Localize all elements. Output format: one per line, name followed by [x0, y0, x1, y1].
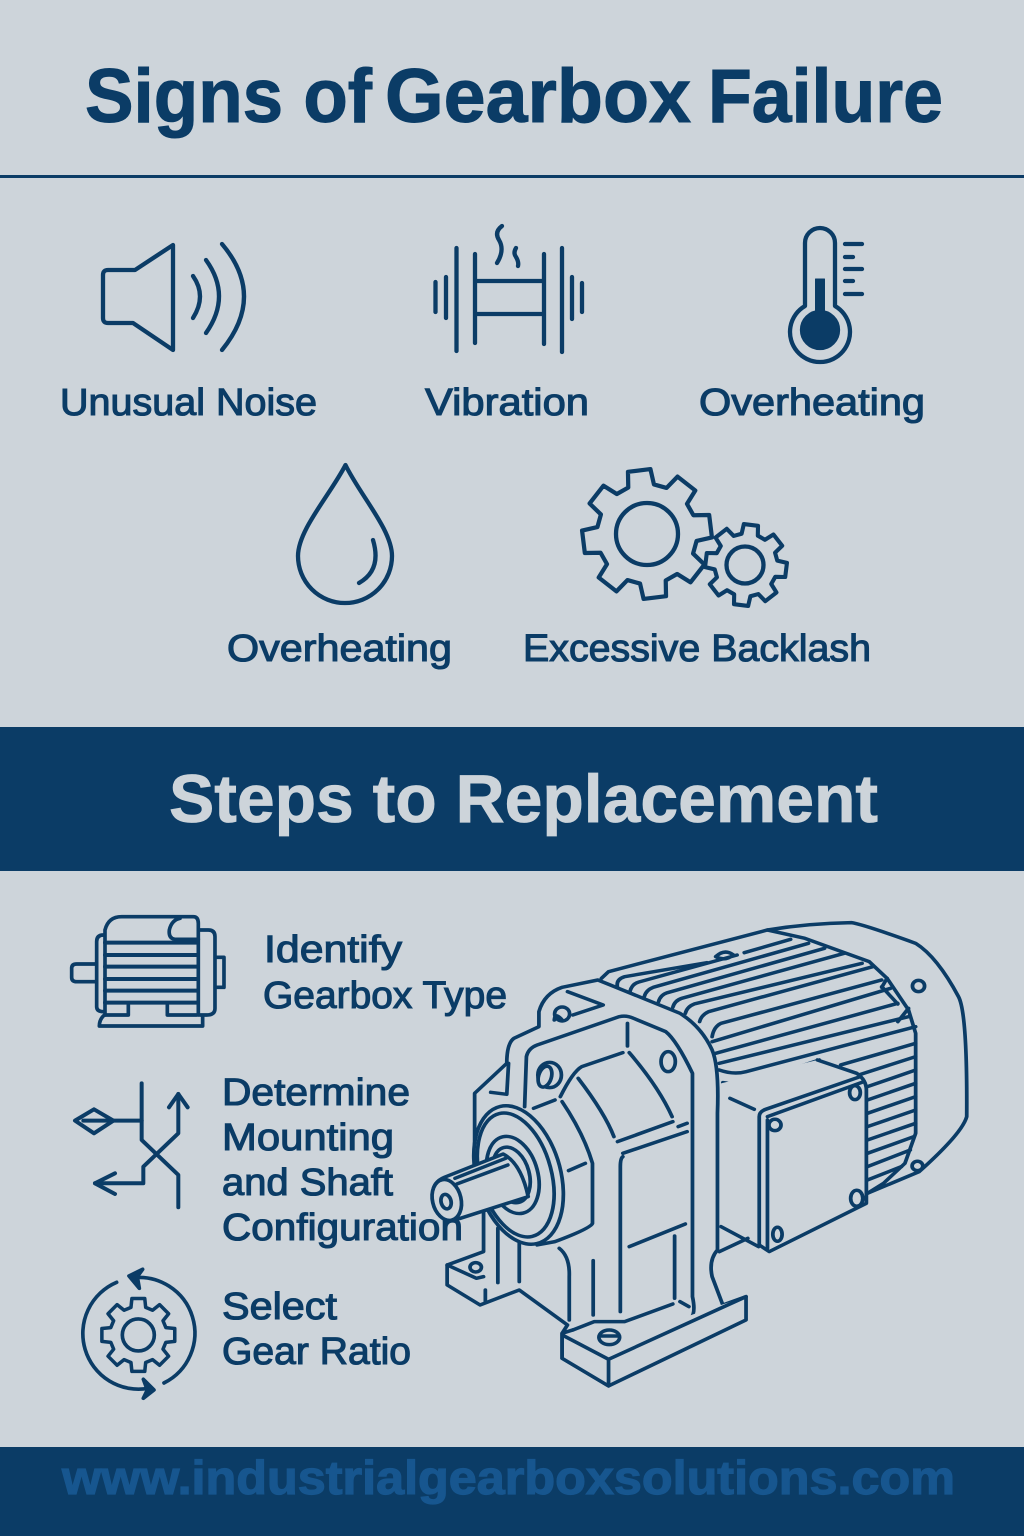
label: select gear ratio: Select: [222, 1286, 337, 1328]
icon: vibration: [436, 226, 582, 352]
label: determine mounting: Determine: [222, 1072, 410, 1114]
label: select gear ratio: Gear Ratio: [222, 1331, 411, 1373]
label: identify gearbox type: [263, 929, 507, 1017]
icon: thermometer: [790, 228, 862, 362]
icon: speaker: [103, 244, 244, 350]
label: determine mounting: [222, 1072, 463, 1249]
banner: steps to replacement: Steps to Replacement: [169, 761, 878, 837]
fan cover: [767, 923, 967, 1193]
title: Failure: [708, 54, 943, 139]
label: determine mounting: and Shaft: [222, 1162, 393, 1204]
icon: gear ratio: [83, 1269, 195, 1398]
terminal box: [719, 1060, 866, 1252]
title: [85, 54, 943, 139]
icon: motor small: [72, 917, 224, 1026]
footer bar: [0, 1447, 1024, 1536]
icon: mounting arrows: [75, 1083, 188, 1207]
icon: oil drop: [298, 465, 392, 603]
housing: [447, 980, 746, 1386]
shaft: [428, 1154, 528, 1223]
motor fins: [601, 930, 916, 1193]
footer bar: www.industrialgearboxsolutions.com: [61, 1451, 955, 1504]
label: identify gearbox type: Gearbox Type: [263, 975, 507, 1017]
flange: [459, 1097, 578, 1253]
icon: gears: [576, 463, 791, 610]
label: select gear ratio: [222, 1286, 411, 1373]
label: identify gearbox type: Identify: [264, 929, 402, 971]
label: excessive backlash: Excessive Backlash: [523, 628, 871, 670]
illustration: gearbox motor: [428, 923, 967, 1386]
title: Signs of: [85, 54, 373, 139]
label: determine mounting: Configuration: [222, 1207, 463, 1249]
label: unusual noise: Unusual Noise: [60, 382, 317, 424]
banner: steps to replacement: [0, 727, 1024, 871]
label: vibration: Vibration: [425, 382, 589, 424]
label: overheating: Overheating: [699, 382, 925, 424]
label: overheating second: Overheating: [227, 628, 452, 670]
title: Gearbox: [385, 54, 691, 139]
label: determine mounting: Mounting: [222, 1117, 394, 1159]
